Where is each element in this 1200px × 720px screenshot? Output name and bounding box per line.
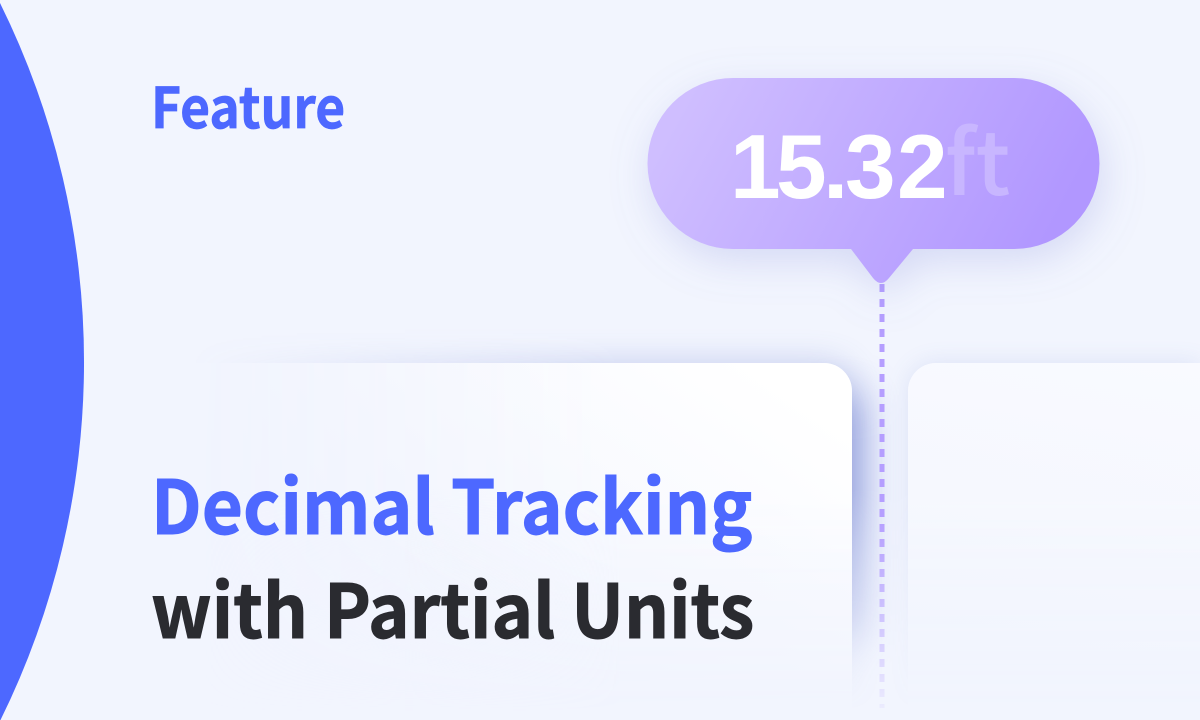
dashed line — [880, 284, 884, 708]
callout: value bubble — [642, 78, 1112, 294]
heading: Feature: Feature — [151, 64, 345, 145]
callout: value bubble: 15.32 — [730, 117, 948, 218]
background circle — [0, 3, 84, 720]
callout: value bubble: ft — [945, 94, 1010, 221]
panel: right card — [904, 358, 1192, 548]
title line: Decimal Tracking: Decimal Tracking — [151, 449, 753, 556]
panel: cards — [331, 348, 1192, 660]
title line: with Partial Units: with Partial Units — [151, 553, 754, 660]
panel: left card — [331, 348, 887, 660]
